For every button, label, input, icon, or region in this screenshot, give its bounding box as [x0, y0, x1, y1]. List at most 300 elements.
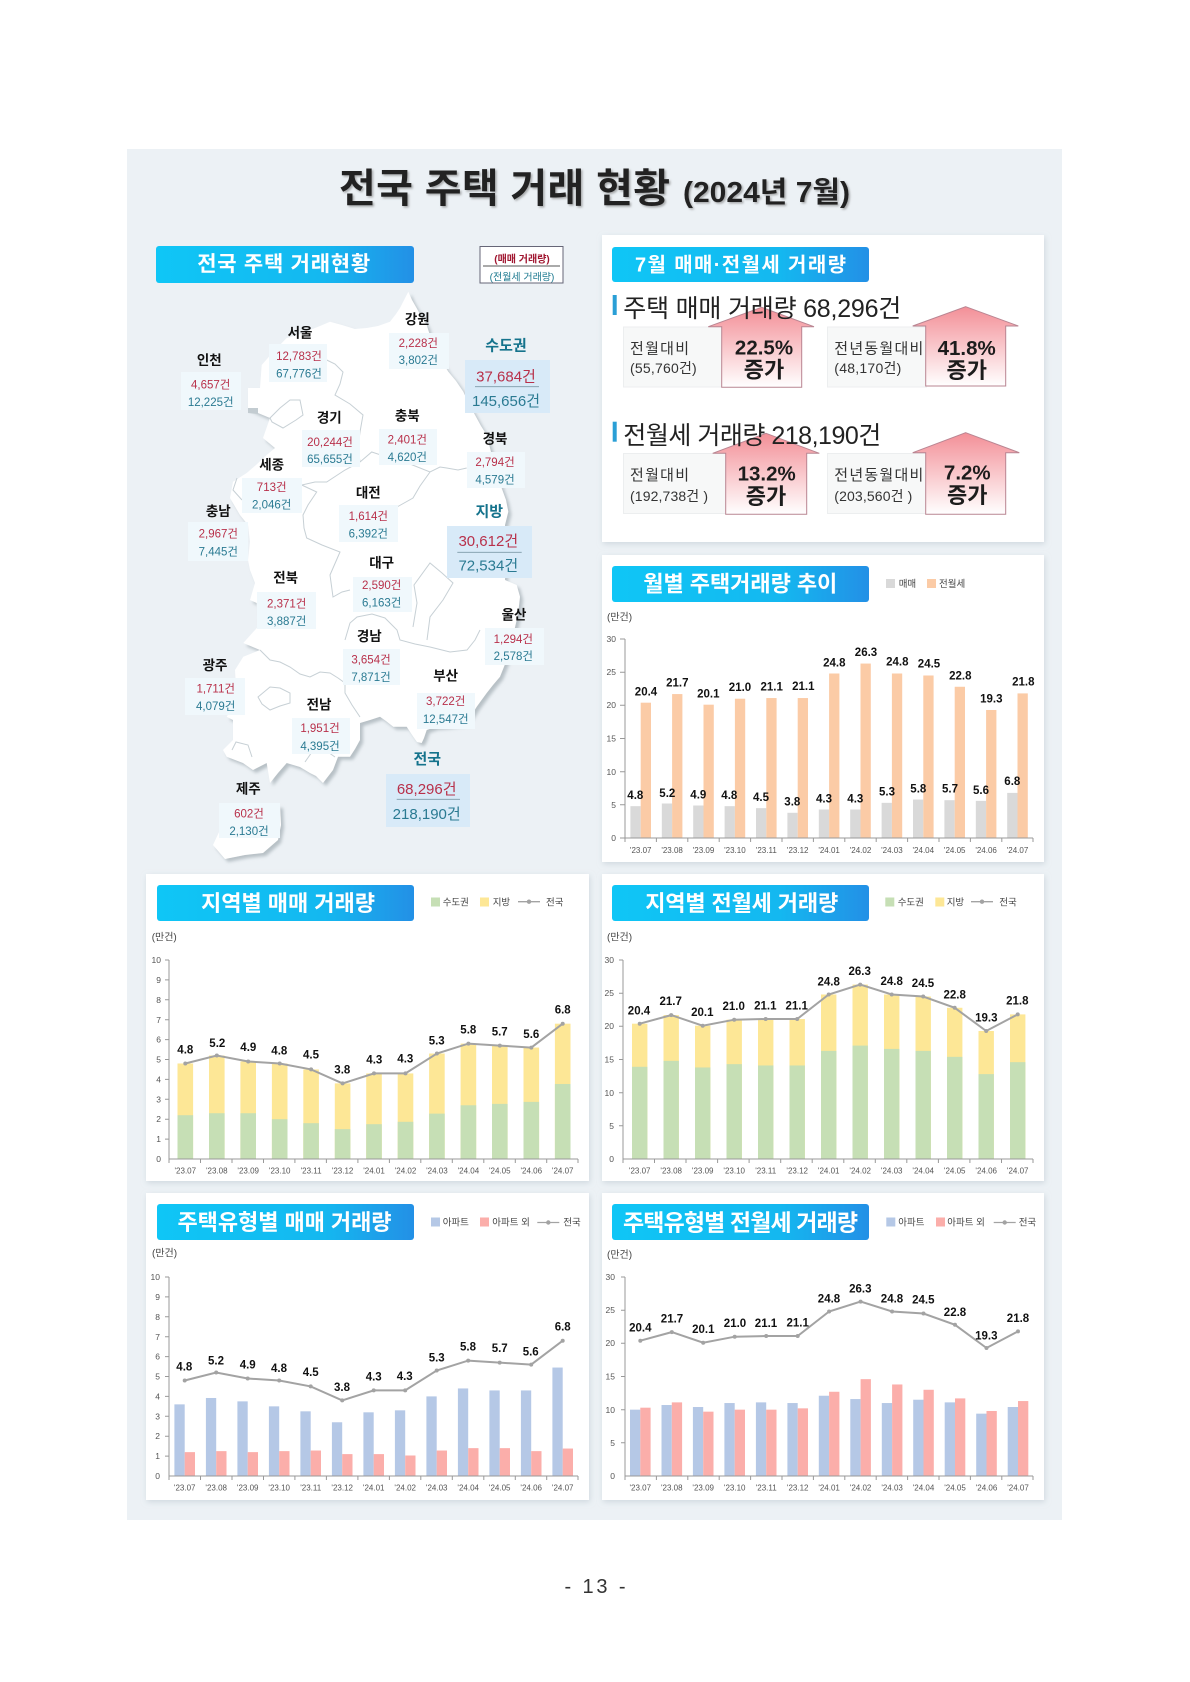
region: 인천: 4,657건: [191, 378, 230, 392]
region: 울산: 1,294건: [494, 633, 533, 646]
bar chart: monthly sale and rent: 5.8: [910, 783, 927, 795]
chart heading: [157, 885, 414, 921]
chart legend: 아파트: [898, 1218, 925, 1228]
chart legend: 아파트 외: [492, 1216, 530, 1228]
panel heading: [612, 247, 869, 282]
clustered bar chart with line: rent by type: 25: [606, 1305, 615, 1315]
clustered bar chart with line: rent by type: '24.04: [913, 1484, 935, 1492]
region: 경남: 경남: [357, 629, 382, 644]
stacked bar chart with line: regional sale: 5.3: [429, 1035, 445, 1047]
clustered bar chart with line: rent by type: '24.03: [881, 1484, 903, 1492]
chart heading: 주택유형별 매매 거래량: [178, 1210, 392, 1235]
clustered bar chart with line: rent by type: 24.8: [881, 1293, 904, 1305]
bar chart: monthly sale and rent: 25: [607, 667, 616, 677]
region: 대구: [353, 556, 412, 612]
clustered bar chart with line: rent by type: '24.02: [850, 1484, 872, 1492]
stacked bar chart with line: regional sale: '24.04: [458, 1166, 480, 1176]
title: [339, 167, 850, 211]
clustered bar chart with line: rent by type: 20.1: [692, 1324, 715, 1336]
stacked bar chart with line: regional sale: 1: [156, 1134, 161, 1144]
unit label: (만건): [607, 932, 632, 944]
region: 인천: 12,225건: [188, 396, 234, 409]
heading: rent volume: 전월세 거래량 218,190건: [623, 422, 881, 450]
region: 경북: 4,579건: [475, 474, 515, 486]
clustered bar chart with line: sale by type: 4: [155, 1392, 160, 1402]
clustered bar chart with line: sale by type: 8: [155, 1312, 160, 1322]
region: 대구: 2,590건: [362, 579, 401, 592]
map legend: (매매 거래량): [494, 252, 550, 266]
region: 경북: 경북: [483, 431, 507, 446]
heading: sale volume: 주택 매매 거래량 68,296건: [623, 295, 901, 323]
bar chart: monthly sale and rent: '24.05: [944, 846, 966, 855]
bar chart: monthly sale and rent: '23.10: [724, 846, 746, 855]
chart legend: 수도권: [898, 896, 924, 908]
region: 울산: 2,578건: [494, 650, 533, 663]
clustered bar chart with line: sale by type: 5.7: [492, 1343, 508, 1355]
clustered bar chart with line: sale by type: 2: [155, 1431, 160, 1441]
clustered bar chart with line: sale by type: '24.02: [394, 1484, 417, 1492]
clustered bar chart with line: sale by type: 0: [155, 1471, 160, 1481]
panel: regional sale volume: [146, 874, 589, 1181]
bar chart: monthly sale and rent: '24.02: [850, 846, 872, 855]
clustered bar chart with line: sale by type: 5.3: [429, 1353, 445, 1365]
rent comparison: previous month: 13.2%: [738, 462, 796, 486]
stacked bar chart with line: regional rent: 19.3: [975, 1013, 997, 1025]
bar chart: monthly sale and rent: '23.08: [661, 846, 683, 855]
rent comparison: previous year: 7.2%: [944, 462, 991, 484]
stacked bar chart with line: regional sale: '24.03: [426, 1166, 448, 1176]
clustered bar chart with line: sale by type: 6: [155, 1352, 160, 1362]
bar chart: monthly sale and rent: 24.5: [918, 659, 941, 671]
clustered bar chart with line: sale by type: 9: [155, 1292, 160, 1302]
bar chart: monthly sale and rent: 24.8: [823, 657, 846, 669]
clustered bar chart with line: rent by type: '23.12: [787, 1484, 809, 1492]
stacked bar chart with line: regional rent: '24.07: [1007, 1166, 1029, 1176]
stacked bar chart with line: regional rent: 20: [605, 1021, 614, 1031]
stacked bar chart with line: regional sale: 2: [156, 1114, 161, 1124]
region: 경북: [467, 431, 525, 488]
stacked bar chart with line: regional rent: '24.04: [912, 1166, 935, 1176]
region: 서울: [269, 326, 327, 382]
unit label: (만건): [152, 1248, 177, 1260]
clustered bar chart with line: sale by type: 4.3: [397, 1371, 413, 1383]
stacked bar chart with line: regional rent: 20.1: [691, 1007, 714, 1019]
stacked bar chart with line: regional rent: '23.11: [755, 1166, 777, 1176]
region: 부산: 12,547건: [423, 713, 469, 726]
stacked bar chart with line: regional sale: '23.12: [332, 1166, 354, 1176]
region: 강원: [389, 312, 449, 369]
clustered bar chart with line: sale by type: 3: [155, 1412, 160, 1422]
panel: rent volume by housing type: [602, 1193, 1044, 1500]
stacked bar chart with line: regional sale: 7: [156, 1015, 161, 1025]
region: 충북: 4,620건: [388, 451, 427, 464]
chart legend: 매매: [899, 579, 916, 590]
stacked bar chart with line: regional sale: [152, 955, 578, 1176]
stacked bar chart with line: regional sale: 3.8: [334, 1065, 351, 1077]
region: 충남: 7,445건: [199, 546, 238, 558]
clustered bar chart with line: sale by type: 4.8: [271, 1363, 288, 1375]
stacked bar chart with line: regional sale: '24.06: [521, 1166, 543, 1176]
sale comparison: previous year: (48,170건): [834, 360, 901, 376]
chart legend: 전국: [1019, 1218, 1036, 1228]
clustered bar chart with line: sale by type: '23.10: [268, 1484, 291, 1492]
bar chart: monthly sale and rent: 5.3: [879, 787, 895, 799]
bar chart: monthly sale and rent: 26.3: [855, 647, 877, 659]
map legend: (전월세 거래량): [490, 272, 554, 284]
map heading: [156, 246, 414, 283]
title: 전국 주택 거래 현황: [339, 167, 670, 211]
panel: monthly volume trend: [602, 555, 1044, 862]
region: 전북: [257, 571, 316, 629]
region: 경남: [343, 629, 400, 685]
region: 전북: 전북: [273, 571, 298, 586]
clustered bar chart with line: rent by type: '24.05: [944, 1484, 966, 1492]
bar chart: monthly sale and rent: 21.1: [761, 681, 783, 693]
stacked bar chart with line: regional sale: 5.2: [209, 1038, 225, 1050]
region: 충남: 충남: [206, 504, 231, 519]
region: 충북: [379, 408, 437, 465]
bar chart: monthly sale and rent: 5: [611, 800, 616, 810]
chart legend: 아파트 외: [947, 1216, 985, 1228]
bar chart: monthly sale and rent: 5.6: [973, 785, 989, 797]
page number: - 13 -: [564, 1576, 626, 1598]
clustered bar chart with line: sale by type: 4.3: [366, 1372, 382, 1384]
stacked bar chart with line: regional sale: 0: [156, 1154, 161, 1164]
clustered bar chart with line: sale by type: 10: [151, 1272, 160, 1282]
region: 전남: 전남: [307, 697, 332, 712]
stacked bar chart with line: regional rent: '23.07: [629, 1166, 651, 1176]
chart heading: [612, 885, 869, 921]
clustered bar chart with line: rent by type: 0: [610, 1471, 615, 1481]
clustered bar chart with line: sale by type: '23.08: [205, 1484, 228, 1492]
region: 충남: [188, 504, 248, 561]
clustered bar chart with line: sale by type: '24.07: [552, 1484, 574, 1492]
clustered bar chart with line: rent by type: 24.5: [912, 1294, 935, 1306]
bar chart: monthly sale and rent: 5.2: [659, 788, 675, 800]
region: 경기: 20,244건: [307, 436, 353, 449]
rent comparison: previous year: 전년동월대비: [834, 467, 923, 484]
map legend: [480, 246, 563, 284]
sale comparison: previous year: 41.8%: [938, 337, 996, 360]
bar chart: monthly sale and rent: 21.8: [1012, 677, 1035, 689]
chart heading: [157, 1204, 414, 1240]
bar chart: monthly sale and rent: 15: [607, 734, 616, 744]
region: 세종: 세종: [259, 457, 284, 472]
unit label: (만건): [607, 612, 632, 624]
region: 서울: 서울: [288, 326, 312, 341]
stacked bar chart with line: regional sale: '23.07: [175, 1166, 197, 1176]
stacked bar chart with line: regional rent: '24.01: [818, 1166, 840, 1176]
bar chart: monthly sale and rent: 19.3: [980, 693, 1002, 705]
clustered bar chart with line: rent by type: [606, 1272, 1033, 1492]
clustered bar chart with line: rent by type: 21.8: [1007, 1313, 1030, 1325]
stacked bar chart with line: regional sale: '23.09: [237, 1166, 260, 1176]
clustered bar chart with line: sale by type: 5.8: [460, 1342, 477, 1354]
rent comparison: previous month: (192,738건 ): [630, 488, 708, 504]
region: 대전: 6,392건: [349, 528, 388, 540]
stacked bar chart with line: regional sale: 6.8: [555, 1004, 571, 1016]
region: 서울: 67,776건: [276, 368, 322, 380]
clustered bar chart with line: sale by type: 4.9: [240, 1359, 256, 1371]
region: 경기: [302, 410, 360, 467]
clustered bar chart with line: sale by type: '23.07: [174, 1484, 196, 1492]
region: 수도권: 145,656건: [472, 393, 540, 410]
clustered bar chart with line: rent by type: 5: [610, 1438, 615, 1448]
region: 광주: 1,711건: [196, 682, 235, 696]
region: 울산: [485, 607, 544, 665]
region: 전북: 3,887건: [267, 615, 306, 628]
clustered bar chart with line: sale by type: 5: [155, 1372, 160, 1382]
bar chart: monthly sale and rent: 21.1: [792, 681, 815, 693]
clustered bar chart with line: rent by type: 19.3: [975, 1330, 997, 1342]
map of Korea: [213, 292, 520, 859]
clustered bar chart with line: sale by type: 4.5: [303, 1367, 319, 1379]
bar chart: monthly sale and rent: '23.09: [693, 846, 715, 855]
region: 전남: 1,951건: [300, 722, 340, 735]
stacked bar chart with line: regional rent: 21.7: [660, 996, 682, 1008]
bar chart: monthly sale and rent: 10: [607, 767, 616, 777]
bar chart: monthly sale and rent: 21.0: [729, 682, 751, 694]
stacked bar chart with line: regional sale: 10: [152, 955, 161, 965]
region: 제주: 602건: [234, 808, 264, 820]
bar chart: monthly sale and rent: '24.04: [913, 846, 935, 855]
panel: sale volume by housing type: [146, 1193, 589, 1500]
clustered bar chart with line: rent by type: 20.4: [629, 1322, 652, 1334]
unit label: (만건): [152, 932, 177, 944]
region: 제주: [219, 781, 280, 838]
unit label: (만건): [607, 1249, 632, 1261]
region: 인천: 인천: [197, 353, 222, 368]
stacked bar chart with line: regional rent: 24.8: [881, 976, 903, 988]
sale comparison: previous month: 증가: [744, 358, 784, 382]
region: 대전: 대전: [356, 485, 381, 500]
bar chart: monthly sale and rent: 4.3: [847, 793, 863, 805]
clustered bar chart with line: sale by type: '24.01: [363, 1484, 385, 1492]
clustered bar chart with line: rent by type: 15: [606, 1372, 615, 1382]
sale comparison: previous year: 증가: [946, 358, 987, 383]
clustered bar chart with line: rent by type: '24.01: [818, 1484, 840, 1492]
clustered bar chart with line: rent by type: 22.8: [944, 1307, 967, 1319]
clustered bar chart with line: sale by type: '24.03: [426, 1484, 448, 1492]
panel: national map: [156, 246, 563, 859]
region: 경기: 경기: [317, 410, 342, 425]
chart legend: 전국: [546, 898, 564, 908]
stacked bar chart with line: regional sale: '23.10: [269, 1166, 291, 1176]
bar chart: monthly sale and rent: '23.07: [630, 846, 652, 855]
clustered bar chart with line: sale by type: '23.09: [237, 1484, 259, 1492]
region: 대전: 1,614건: [349, 510, 388, 523]
stacked bar chart with line: regional rent: '23.10: [723, 1166, 746, 1176]
stacked bar chart with line: regional rent: 21.8: [1006, 996, 1029, 1008]
bar chart: monthly sale and rent: 5.7: [942, 784, 958, 796]
chart legend: [886, 578, 965, 590]
region: 경기: 65,655건: [307, 453, 353, 466]
bar chart: monthly sale and rent: 20.1: [697, 688, 720, 700]
bar chart: monthly sale and rent: 3.8: [784, 797, 801, 809]
stacked bar chart with line: regional rent: '23.08: [660, 1166, 683, 1176]
clustered bar chart with line: sale by type: 5.6: [523, 1346, 539, 1358]
bar chart: monthly sale and rent: '23.11: [756, 846, 777, 855]
bar chart: monthly sale and rent: 4.8: [627, 790, 644, 802]
region: 강원: 3,802건: [399, 354, 438, 367]
chart heading: 지역별 매매 거래량: [201, 891, 375, 916]
bar chart: monthly sale and rent: 24.8: [886, 657, 909, 669]
region: 제주: 2,130건: [229, 825, 269, 838]
chart legend: 지방: [493, 898, 510, 908]
title: (2024년 7월): [683, 176, 850, 209]
bar chart: monthly sale and rent: '24.03: [881, 846, 903, 855]
region: 전남: [292, 697, 350, 754]
bar chart: monthly sale and rent: 4.9: [690, 789, 706, 801]
clustered bar chart with line: sale by type: 4.8: [176, 1362, 193, 1374]
stacked bar chart with line: regional sale: 3: [156, 1094, 161, 1104]
bar chart: monthly sale and rent: 4.5: [753, 792, 770, 804]
stacked bar chart with line: regional sale: 5.8: [460, 1024, 477, 1036]
clustered bar chart with line: rent by type: 30: [606, 1272, 615, 1282]
stacked bar chart with line: regional sale: 9: [156, 975, 161, 985]
stacked bar chart with line: regional sale: '23.08: [206, 1166, 228, 1176]
region: 충북: 2,401건: [388, 434, 427, 446]
stacked bar chart with line: regional rent: '23.12: [786, 1166, 809, 1176]
region: 수도권: 수도권: [485, 338, 527, 354]
region: 대구: 대구: [369, 556, 394, 571]
clustered bar chart with line: sale by type: '24.06: [520, 1484, 543, 1492]
stacked bar chart with line: regional sale: '23.11: [301, 1166, 322, 1176]
region: 세종: [242, 457, 302, 513]
bar chart: monthly sale and rent: '23.12: [787, 846, 809, 855]
sale comparison: previous year: [828, 307, 1018, 387]
region: 경남: 7,871건: [351, 671, 391, 684]
panel: July sale and rent volume: [602, 235, 1044, 542]
bar chart: monthly sale and rent: 6.8: [1004, 776, 1021, 788]
stacked bar chart with line: regional rent: 5: [609, 1121, 614, 1131]
clustered bar chart with line: sale by type: 5.2: [208, 1355, 224, 1367]
region: 강원: 2,228건: [399, 337, 438, 350]
bar chart: monthly sale and rent: 30: [607, 634, 616, 644]
sale comparison: previous month: (55,760건): [630, 360, 697, 376]
region: 부산: [417, 669, 475, 729]
bar chart: monthly sale and rent: 0: [611, 833, 616, 843]
clustered bar chart with line: sale by type: 6.8: [555, 1322, 571, 1334]
stacked bar chart with line: regional sale: 5: [156, 1054, 161, 1064]
region: 대구: 6,163건: [362, 596, 401, 610]
stacked bar chart with line: regional rent: 25: [605, 988, 614, 998]
chart legend: [431, 896, 564, 908]
stacked bar chart with line: regional rent: '24.06: [975, 1166, 998, 1176]
rent comparison: previous year: (203,560건 ): [834, 488, 912, 504]
rent comparison: previous year: 증가: [947, 483, 988, 508]
region: 수도권: [465, 338, 550, 413]
clustered bar chart with line: rent by type: 24.8: [818, 1293, 841, 1305]
region: 전국: 전국: [413, 751, 441, 768]
stacked bar chart with line: regional rent: '24.03: [881, 1166, 903, 1176]
panel: regional rent volume: [602, 874, 1044, 1181]
clustered bar chart with line: sale by type: '23.11: [300, 1484, 322, 1492]
chart heading: [612, 566, 869, 602]
clustered bar chart with line: rent by type: '23.09: [692, 1484, 715, 1492]
sale comparison: previous month: 전월대비: [630, 340, 689, 358]
clustered bar chart with line: sale by type: 3.8: [334, 1382, 351, 1394]
chart heading: 지역별 전월세 거래량: [645, 891, 838, 916]
chart legend: [431, 1216, 581, 1228]
region: 지방: 지방: [475, 504, 503, 520]
clustered bar chart with line: rent by type: '24.06: [976, 1484, 998, 1492]
region: 지방: 30,612건: [458, 533, 518, 550]
stacked bar chart with line: regional rent: 21.0: [723, 1001, 745, 1013]
region: 전북: 2,371건: [267, 598, 306, 610]
bar chart: monthly sale and rent: '24.07: [1007, 846, 1029, 855]
stacked bar chart with line: regional rent: 30: [605, 955, 614, 965]
region: 전국: [386, 751, 470, 827]
chart heading: 주택유형별 전월세 거래량: [623, 1210, 858, 1236]
region: 전국: 218,190건: [393, 806, 461, 823]
clustered bar chart with line: rent by type: '24.07: [1007, 1484, 1029, 1492]
stacked bar chart with line: regional rent: 0: [609, 1154, 614, 1164]
region: 전국: 68,296건: [397, 781, 457, 798]
stacked bar chart with line: regional sale: 5.6: [523, 1029, 539, 1041]
chart legend: 아파트: [443, 1218, 469, 1228]
region: 인천: [181, 353, 241, 410]
region: 지방: 72,534건: [458, 558, 518, 574]
region: 제주: 제주: [236, 781, 261, 796]
bar chart: monthly sale and rent: '24.01: [818, 846, 840, 855]
stacked bar chart with line: regional sale: 4.8: [271, 1046, 288, 1058]
chart legend: [886, 1216, 1036, 1228]
clustered bar chart with line: rent by type: 21.0: [724, 1318, 746, 1330]
chart legend: 전국: [563, 1218, 581, 1228]
clustered bar chart with line: sale by type: 1: [155, 1451, 160, 1461]
clustered bar chart with line: sale by type: '24.04: [457, 1484, 480, 1492]
clustered bar chart with line: sale by type: '24.05: [489, 1484, 511, 1492]
region: 수도권: 37,684건: [476, 368, 536, 386]
region: 광주: 광주: [203, 658, 227, 673]
region: 경남: 3,654건: [351, 654, 391, 666]
stacked bar chart with line: regional sale: 4.3: [366, 1054, 382, 1066]
stacked bar chart with line: regional sale: 4.3: [397, 1054, 413, 1066]
stacked bar chart with line: regional rent: [605, 955, 1033, 1176]
stacked bar chart with line: regional sale: 8: [156, 995, 161, 1005]
chart legend: 전국: [999, 898, 1017, 908]
rent comparison: previous month: 증가: [746, 484, 786, 509]
chart heading: 월별 주택거래량 추이: [643, 572, 837, 596]
chart legend: 지방: [947, 898, 964, 908]
bar chart: monthly sale and rent: [607, 634, 1035, 855]
region: 지방: [447, 504, 532, 578]
bar chart: monthly sale and rent: '24.06: [975, 846, 997, 855]
stacked bar chart with line: regional rent: 24.5: [912, 978, 935, 990]
stacked bar chart with line: regional sale: 4.8: [177, 1044, 194, 1056]
stacked bar chart with line: regional sale: '24.01: [363, 1166, 385, 1176]
clustered bar chart with line: rent by type: '23.07: [630, 1484, 652, 1492]
region: 광주: [185, 658, 245, 715]
region: 충남: 2,967건: [199, 528, 238, 540]
region: 세종: 2,046건: [252, 498, 291, 512]
clustered bar chart with line: rent by type: '23.10: [724, 1484, 746, 1492]
region: 강원: 강원: [405, 312, 430, 327]
clustered bar chart with line: rent by type: 26.3: [849, 1283, 871, 1295]
chart legend: 수도권: [443, 896, 469, 908]
clustered bar chart with line: rent by type: '23.11: [756, 1484, 777, 1492]
stacked bar chart with line: regional rent: '24.05: [944, 1166, 966, 1176]
bar chart: monthly sale and rent: 22.8: [949, 670, 972, 682]
region: 울산: 울산: [502, 607, 527, 622]
map heading: 전국 주택 거래현황: [197, 253, 370, 276]
stacked bar chart with line: regional rent: 15: [605, 1054, 614, 1064]
region: 세종: 713건: [257, 481, 287, 494]
clustered bar chart with line: sale by type: '23.12: [331, 1484, 354, 1492]
chart legend: [885, 896, 1017, 908]
stacked bar chart with line: regional rent: '23.09: [692, 1166, 714, 1176]
